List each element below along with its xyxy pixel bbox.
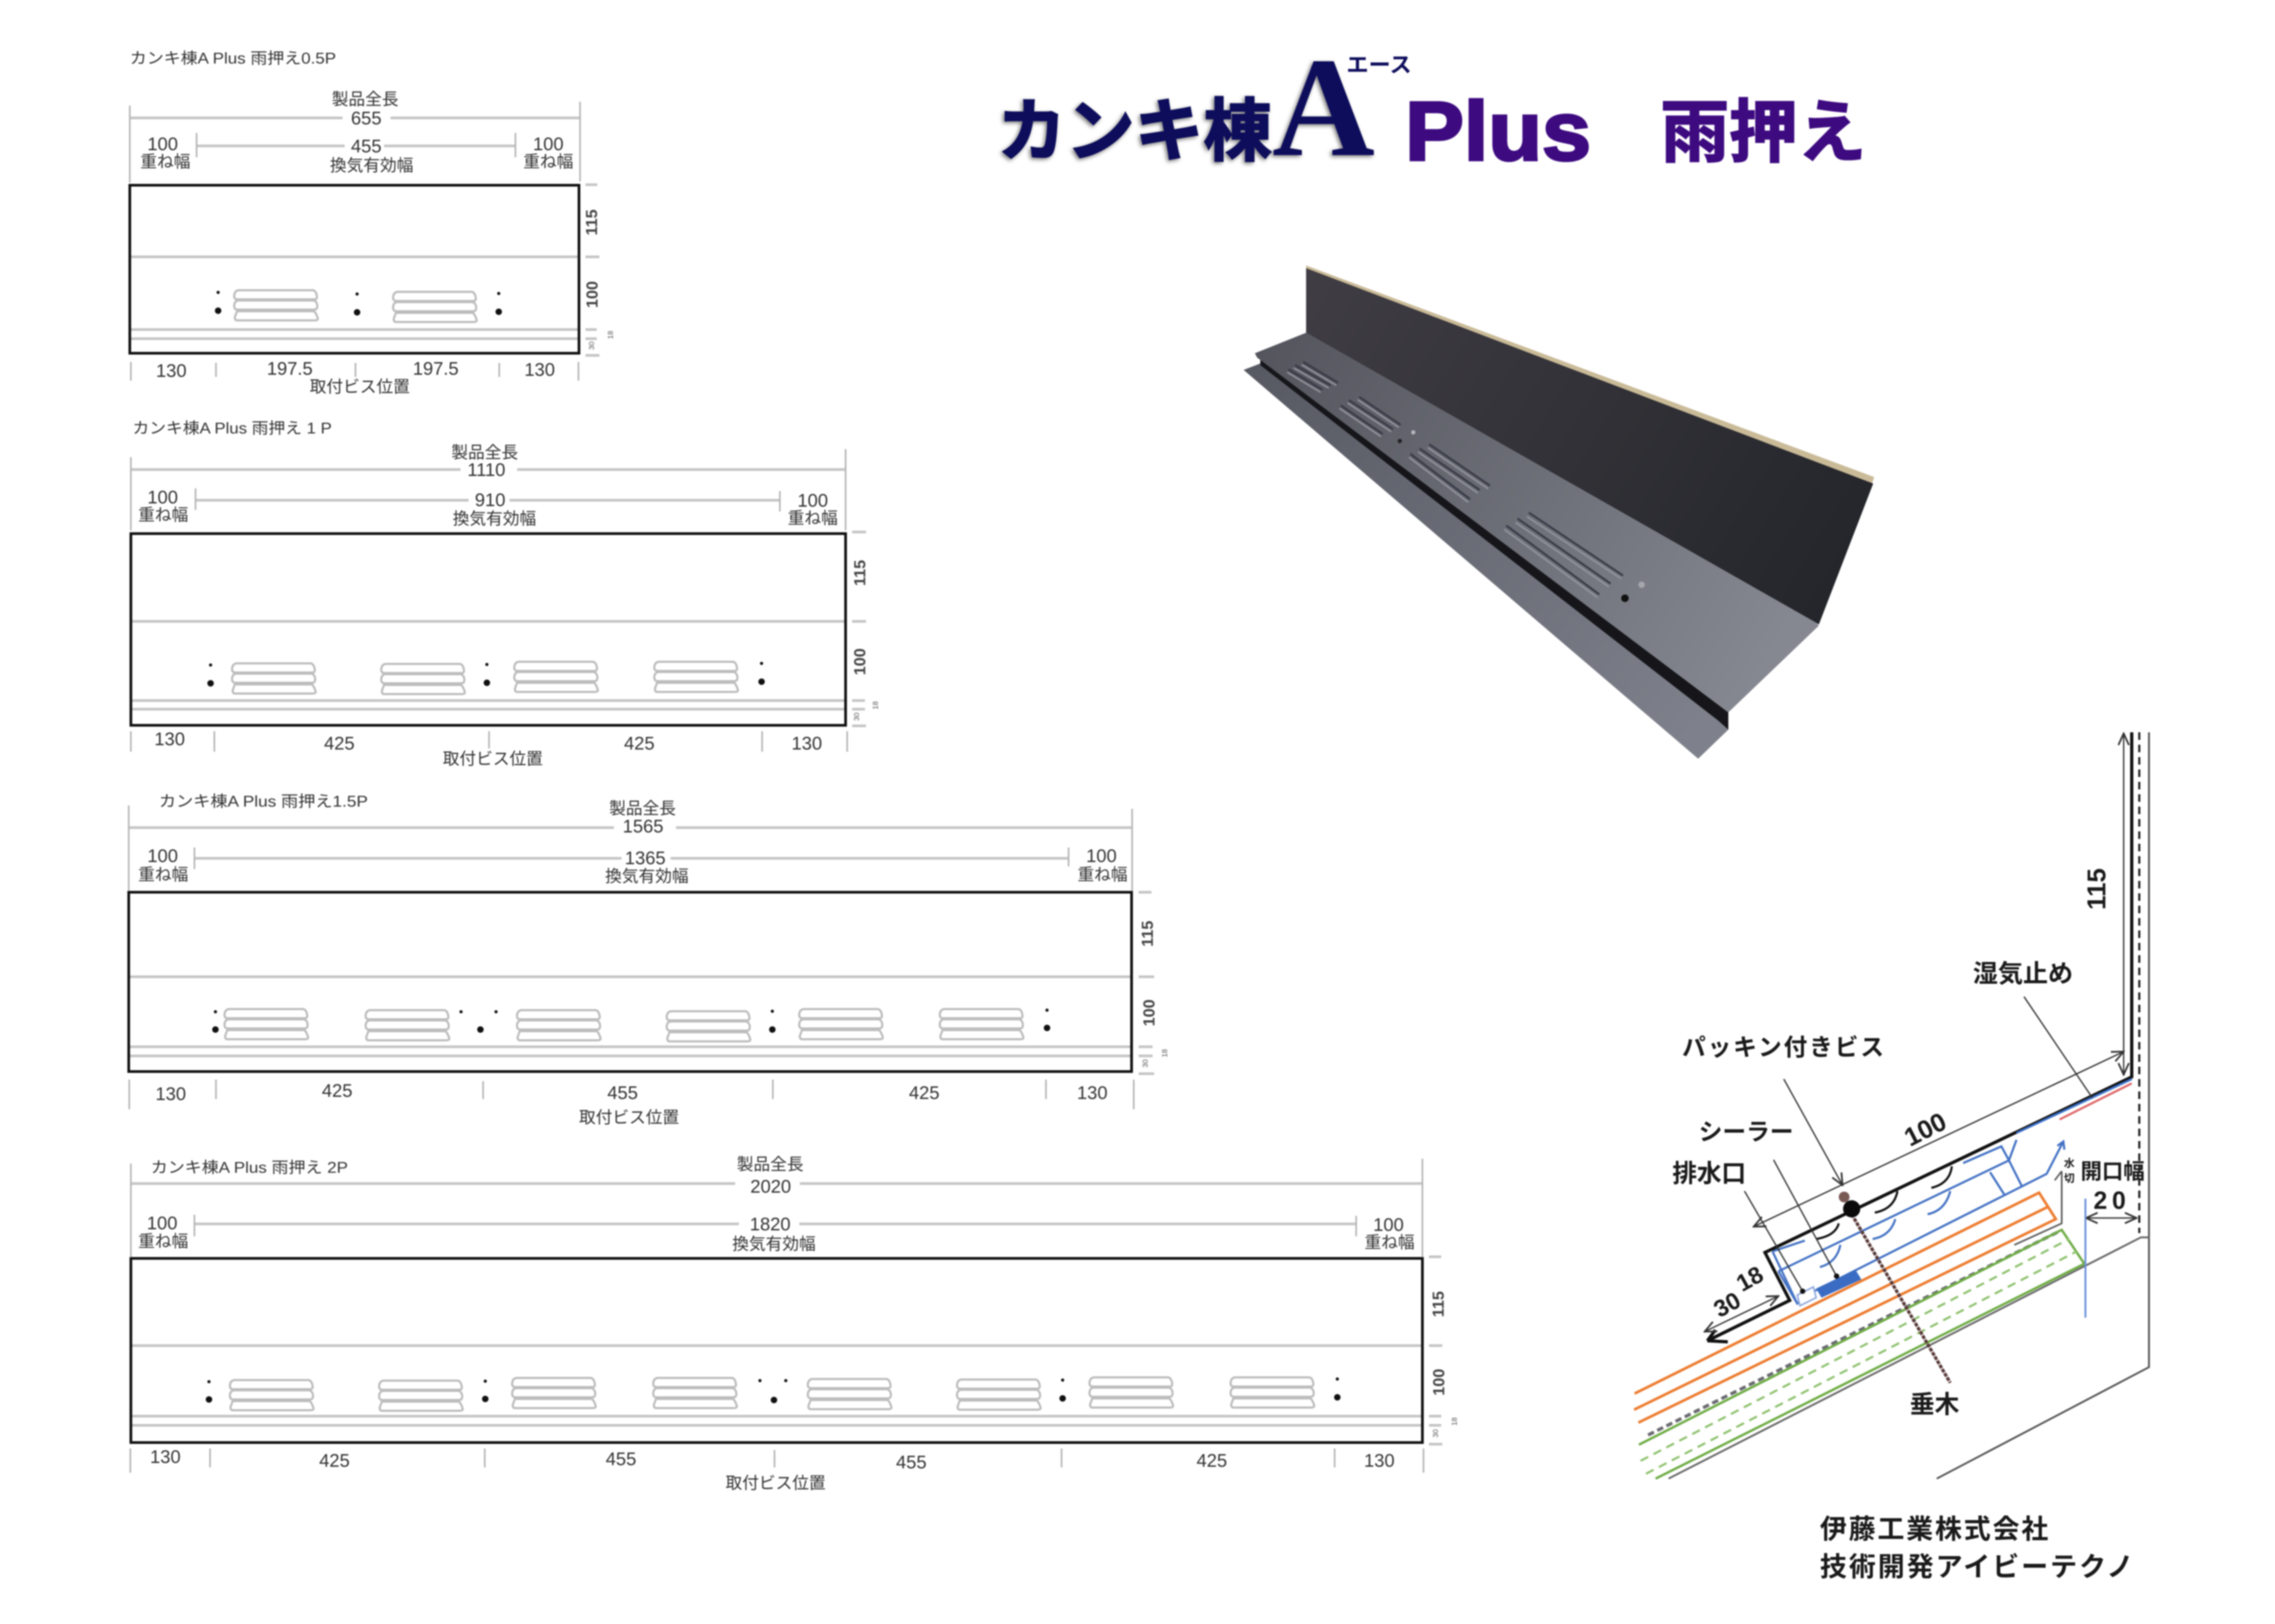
product outline [131,534,846,725]
height dimensions: 100 [1141,999,1158,1026]
water cut leader [2014,1171,2062,1245]
screw spacing dimensions: 455 [608,1083,638,1103]
company line 1: 伊藤工業株式会社 [1820,1514,2048,1544]
dimension: left overlap 100 [140,134,191,171]
panel title: 2P: カンキ棟A Plus 雨押え 2P [151,1159,348,1177]
screw positions [215,291,502,316]
screw spacing dimensions: 425 [324,733,354,754]
leader: moisture stop [2024,997,2092,1098]
louvers [230,1377,1314,1411]
upright wall face [1306,268,1873,625]
screw spacing dimensions: 130 [156,1084,186,1104]
dimension line 100 [1754,1052,2124,1227]
dimension: right overlap 100: 重ね幅 [787,509,838,528]
dimension: ventilation width 1365: 換気有効幅 [605,867,688,886]
dimension: left overlap 100 [138,1213,189,1251]
dimension: ventilation width 1820 [194,1214,1356,1254]
screw spacing dimensions: 197.5 [267,359,313,379]
screw spacing dimensions: 130 [155,729,185,750]
screw positions [206,1377,1341,1403]
blue sealer block [1816,1270,1861,1298]
screw spacing dimensions: 取付ビス位置 [310,377,410,396]
label: 20: 20 [2093,1186,2126,1214]
dimension: ventilation width 1820: 1820 [750,1214,791,1235]
dimension: left overlap 100: 100 [148,487,178,508]
orange batten layers [1634,1193,2056,1423]
screw spacing dimensions [130,1447,1423,1493]
rafter screw shaft [1852,1214,1950,1383]
vent louvers [1288,362,1622,597]
title: ace ruby: エース [1346,53,1412,77]
green board layers [1639,1230,2084,1479]
title: letter A: A [1272,29,1375,186]
panel title: 1P: カンキ棟A Plus 雨押え 1 P [132,419,332,437]
dimension: overall length 1565 [129,806,1132,891]
dimension: left overlap 100: 100 [147,1213,177,1234]
screw spacing dimensions: 425 [909,1083,939,1103]
height dimensions: 30 [587,341,596,350]
height dimension arrow 115 [2123,733,2124,1075]
screw spacing dimensions: 130 [150,1447,180,1467]
dimension: overall length 1110 [131,449,846,530]
dimension: ventilation width 910: 換気有効幅 [452,509,536,528]
dimension: left overlap 100: 100 [148,846,178,866]
title: Kanki-mune: カンキ棟 [997,93,1272,170]
height dimensions: 30 [1141,1059,1149,1068]
dimension: overall length 1565: 1565 [623,816,664,837]
label: sealer: シーラー [1699,1119,1794,1145]
dimension: overall length 2020: 2020 [750,1177,791,1197]
louvers [232,662,738,694]
dimension label 18: 18 [1732,1261,1768,1297]
screw spacing dimensions: 425 [624,733,654,754]
packing screw head [1839,1192,1860,1217]
dimension: ventilation width 455: 455 [351,136,381,157]
dimension: ventilation width 1365: 1365 [625,848,666,869]
height dimensions [851,532,880,726]
screw spacing dimensions: 425 [1197,1451,1227,1471]
height dimensions [583,185,615,355]
dimension arrow 30 [1705,1296,1778,1332]
louver highlights [1288,365,1621,597]
louvers [225,1009,1023,1041]
louvers [234,290,477,322]
dimension: ventilation width 1820: 換気有効幅 [732,1235,815,1254]
dimension label 115: 115 [2083,868,2111,910]
screw spacing dimensions [131,729,847,768]
height dimensions: 115 [1139,921,1157,947]
title: rain flashing: 雨押え [1660,94,1866,171]
dimension: overall length 2020 [131,1159,1422,1257]
dimension arrow 20 [2086,1217,2137,1219]
label: overall length: 製品全長 [737,1155,804,1174]
screw spacing dimensions [131,359,578,396]
screw positions [212,1009,1050,1033]
dimension: left overlap 100: 重ね幅 [138,506,189,524]
dashed underlay [1648,1231,2060,1435]
label: overall length: 製品全長 [609,799,676,818]
screw spacing dimensions: 130 [1077,1083,1107,1103]
dimension: left overlap 100 [138,846,189,884]
label: rafter: 垂木 [1910,1390,1959,1418]
screw spacing dimensions: 取付ビス位置 [443,750,543,768]
dimension: left overlap 100 [138,487,189,524]
screw spacing dimensions: 425 [322,1081,352,1101]
sloped vent surface [1255,333,1819,712]
dimension: left overlap 100: 重ね幅 [138,865,189,884]
dimension: left overlap 100: 100 [148,134,178,155]
product outline [129,892,1132,1072]
dimension: overall length 655: 655 [351,108,381,129]
screw spacing dimensions: 取付ビス位置 [579,1108,679,1127]
dimension: left overlap 100: 重ね幅 [138,1232,189,1251]
dimension label 100: 100 [1900,1107,1951,1152]
screw holes [1398,430,1645,602]
panel: rain flashing 1P drawing [131,419,880,768]
screw spacing dimensions: 455 [896,1452,926,1473]
dimension: right overlap 100: 重ね幅 [524,152,573,171]
label: water cut: 切 [2064,1172,2075,1185]
dark step [1260,360,1728,730]
panel: rain flashing 0.5P drawing [130,50,615,396]
height dimensions: 100 [1430,1369,1448,1396]
label: moisture stop: 湿気止め [1973,960,2073,988]
leader: drain [1744,1191,1805,1294]
screw positions [207,662,765,687]
lower flange [1244,363,1728,759]
screw spacing dimensions: 197.5 [413,359,459,379]
dimension: ventilation width 910: 910 [475,490,505,510]
product outline [131,1258,1422,1443]
title: Plus: Plus [1405,85,1591,178]
blue flashing body [1772,1140,2064,1304]
label: opening width: 開口幅 [2081,1160,2145,1184]
dimension: ventilation width 455 [197,133,515,175]
screw spacing dimensions: 取付ビス位置 [725,1474,826,1493]
company name [1820,1514,2133,1582]
tan top edge [1306,265,1874,486]
screw spacing dimensions: 455 [606,1449,636,1469]
height dimensions: 115 [583,209,601,235]
screw spacing dimensions: 130 [792,733,822,754]
dimension: right overlap 100: 100 [798,491,828,511]
green dashed layers [1641,1239,2077,1474]
dimension: ventilation width 910 [196,488,780,528]
label: overall length: 製品全長 [332,90,399,109]
screw spacing dimensions: 130 [1364,1451,1394,1471]
height dimensions: 18 [1160,1049,1169,1058]
panel title: 0.5P: カンキ棟A Plus 雨押え0.5P [130,50,336,67]
black vent curves [1816,1166,1952,1239]
product outline [130,185,579,353]
dimension: right overlap 100: 100 [1373,1215,1404,1235]
height dimensions: 18 [606,331,615,339]
dimension: ventilation width 455: 換気有効幅 [330,156,414,175]
louver grooves [1289,362,1622,594]
company line 2: 技術開発アイビーテクノ [1820,1552,2133,1582]
panel: rain flashing 1.5P drawing [129,793,1169,1127]
dimension: right overlap 100: 100 [1086,846,1116,866]
main title [997,29,1866,186]
label: water cut [2064,1157,2075,1185]
dimension: overall length 1110: 1110 [467,460,505,480]
black main plate [1707,732,2132,1342]
dimension: right overlap 100 [524,134,573,171]
leader: sealer [1774,1160,1839,1279]
dimension label 30: 30 [1709,1287,1745,1323]
dimension: left overlap 100: 重ね幅 [140,152,191,171]
screw spacing dimensions: 425 [319,1451,350,1471]
dimension: right overlap 100: 100 [533,134,563,155]
section diagram [1634,732,2149,1479]
height dimensions: 115 [851,560,869,586]
screw spacing dimensions: 130 [525,360,555,380]
dimension: right overlap 100: 重ね幅 [1077,865,1128,884]
leader: packing screw [1784,1079,1843,1185]
dimension: right overlap 100: 重ね幅 [1365,1233,1414,1252]
label: packing screw: パッキン付きビス [1682,1034,1884,1061]
height dimensions: 30 [852,712,861,721]
height dimensions: 115 [1429,1291,1448,1317]
dimension: right overlap 100 [1077,846,1128,884]
dimension: overall length 655 [130,102,580,183]
panel: rain flashing 2P drawing [130,1155,1458,1493]
height dimensions [1139,892,1169,1074]
screw spacing dimensions [129,1080,1134,1127]
height dimensions: 18 [1450,1417,1458,1426]
label: overall length: 製品全長 [451,443,518,462]
height dimensions: 30 [1431,1429,1440,1438]
wall lines [1669,732,2149,1479]
screw spacing dimensions: 130 [156,361,186,381]
label: water cut: 水 [2064,1157,2075,1170]
height dimensions: 18 [871,701,880,710]
drain opening [1797,1287,1816,1306]
moisture stop lines [2016,1079,2132,1133]
blue opening line [2084,1199,2086,1318]
dimension: ventilation width 1365 [194,848,1069,886]
dimension: right overlap 100 [1365,1215,1414,1252]
height dimensions: 100 [584,281,601,308]
height dimensions: 100 [851,648,869,675]
panel title: 1.5P: カンキ棟A Plus 雨押え1.5P [159,793,368,810]
height dimensions [1429,1257,1458,1444]
dimension: right overlap 100 [787,491,838,528]
label: drain: 排水口 [1672,1159,1746,1187]
product photo illustration [1244,265,1874,759]
